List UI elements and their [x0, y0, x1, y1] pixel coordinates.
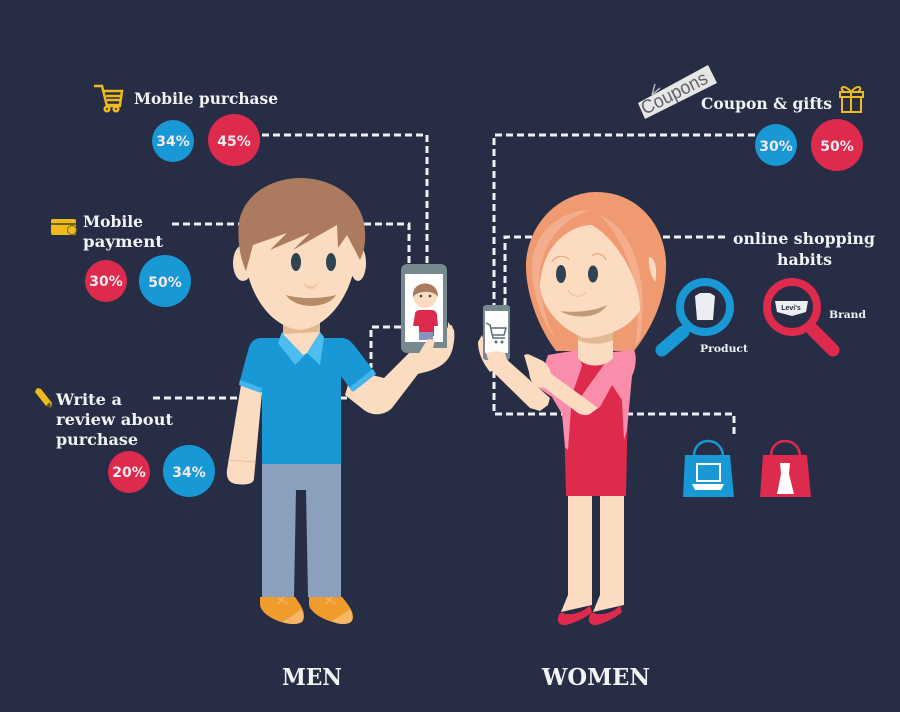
man left arm	[227, 385, 262, 484]
icon: product magnifier	[662, 282, 730, 350]
icon: pencil	[35, 388, 52, 408]
man phone	[401, 264, 454, 370]
woman phone	[478, 305, 510, 372]
woman legs	[561, 490, 624, 612]
stat 20%	[108, 451, 150, 493]
icon: brand magnifier	[767, 282, 833, 350]
icon: blue bag with laptop	[683, 441, 734, 497]
icon: red bag with dress	[760, 441, 811, 497]
stat men 34%	[152, 120, 194, 162]
stat 34%	[163, 445, 215, 497]
connector lines	[153, 135, 755, 438]
stat 20%: 20%	[112, 465, 146, 481]
woman hair	[526, 192, 666, 351]
online shopping habits group	[662, 229, 875, 497]
heading: online shopping	[733, 229, 875, 248]
stat 30%: 30%	[89, 274, 123, 290]
label: women: WOMEN	[541, 664, 650, 691]
stat 34%: 34%	[172, 465, 206, 481]
man figure	[227, 178, 454, 624]
woman pointing hand	[524, 354, 551, 388]
man shoes	[260, 597, 353, 624]
mobile purchase group	[94, 86, 278, 166]
stat women 45%: 45%	[217, 134, 251, 150]
heading: Mobile	[83, 212, 143, 231]
mini avatar	[413, 284, 438, 340]
man collar	[278, 332, 324, 365]
man shirt	[239, 338, 376, 464]
stat women 45%	[208, 114, 260, 166]
icon: cart	[94, 86, 122, 111]
label: brand: Brand	[829, 309, 867, 321]
icon: brand magnifier: Levi's	[781, 305, 801, 312]
heading: habits	[777, 250, 832, 269]
man right arm	[345, 325, 454, 414]
man hand	[412, 322, 454, 370]
heading: Coupon & gifts	[701, 94, 832, 113]
woman neck	[578, 330, 613, 366]
woman face	[540, 225, 640, 338]
man head	[245, 214, 356, 330]
icon: gift	[840, 87, 863, 112]
mobile payment group	[51, 212, 191, 307]
heading: Mobile purchase	[134, 89, 278, 108]
label: product: Product	[700, 343, 748, 355]
woman mouth	[560, 305, 607, 317]
stat 50%: 50%	[820, 139, 854, 155]
stat men 34%: 34%	[156, 134, 190, 150]
phone cart icon	[486, 323, 506, 338]
icon: credit card	[51, 219, 76, 235]
stat 30%: 30%	[759, 139, 793, 155]
man nose and mouth	[303, 282, 319, 290]
woman figure	[487, 192, 666, 625]
man neck	[283, 320, 320, 360]
label: men: MEN	[282, 664, 342, 691]
icon: coupon ticket: Coupons	[638, 68, 711, 119]
woman left arm	[487, 358, 550, 411]
woman eyes	[556, 265, 566, 283]
heading: purchase	[56, 430, 138, 449]
woman cardigan	[537, 350, 636, 450]
woman pointing arm	[534, 370, 598, 415]
stat 50%: 50%	[148, 275, 182, 291]
heading: payment	[83, 232, 164, 251]
man eyes	[291, 253, 301, 271]
man hair	[238, 178, 365, 271]
stat 50%	[811, 119, 863, 171]
review group	[35, 388, 215, 497]
woman shoes	[558, 605, 622, 625]
heading: review about	[56, 410, 174, 429]
man legs	[262, 460, 341, 597]
heading: Write a	[55, 390, 122, 409]
coupon group	[638, 65, 863, 171]
stat 30%	[755, 124, 797, 166]
woman dress	[564, 358, 628, 496]
